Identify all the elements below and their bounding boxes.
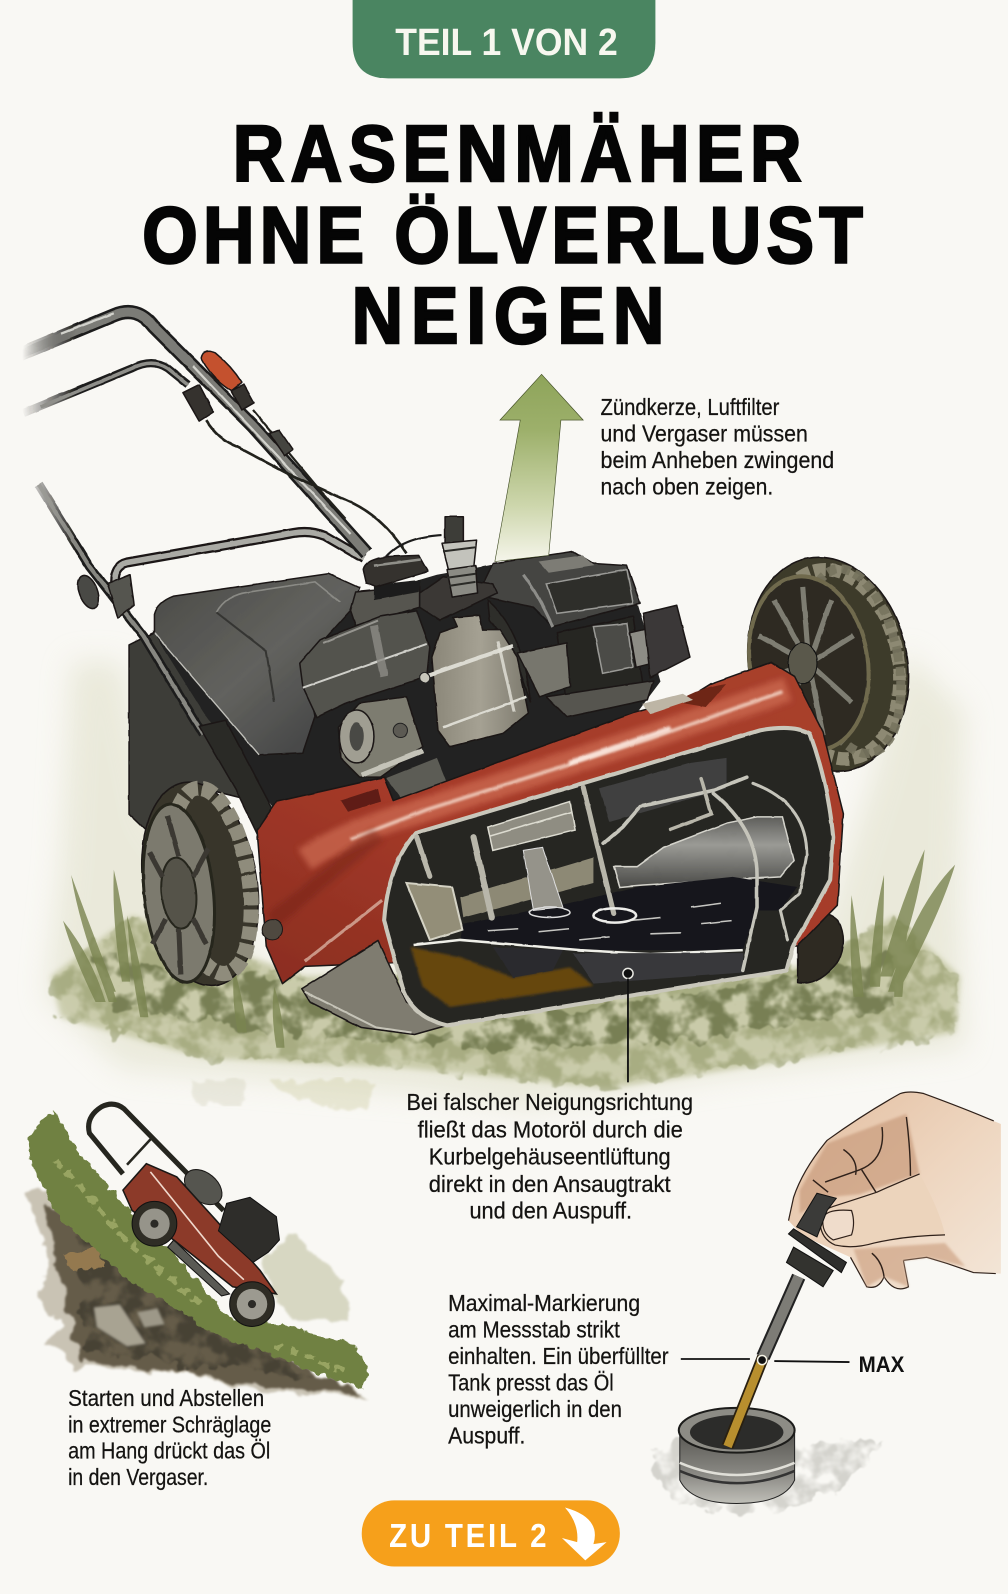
hand silhouette — [789, 1092, 1001, 1289]
green up arrow — [495, 374, 583, 562]
cutaway engine window — [384, 728, 833, 1025]
fuel cap — [351, 555, 428, 626]
piston assembly — [488, 802, 575, 850]
text: dipstick warning: Maximal-Markierung — [448, 1290, 640, 1316]
grass highlight strokes — [56, 1160, 345, 1371]
oil surface line — [414, 940, 743, 954]
hand — [789, 1092, 1001, 1289]
button: next part — [362, 1500, 620, 1567]
slope grass band — [28, 1109, 367, 1390]
header tab: part indicator: TEIL 1 VON 2 — [395, 21, 618, 63]
main handle bars — [20, 312, 442, 559]
title: RASENMÄHER — [233, 110, 802, 198]
oil filler neck — [650, 1408, 884, 1516]
finger tips shading — [854, 1243, 965, 1287]
MAX leader lines and label: MAX — [859, 1352, 904, 1377]
text: dipstick warning: Auspuff. — [448, 1422, 525, 1448]
text: slope warning: am Hang drückt das Öl — [68, 1438, 270, 1464]
text: wrong tilt direction: Kurbelgehäuseentlüftung — [429, 1144, 671, 1170]
main illustration: cutaway lawn mower — [20, 312, 926, 1035]
text: upward components — [601, 394, 834, 499]
text: dipstick warning: Tank presst das Öl — [448, 1370, 614, 1396]
lower frame rail with bracket — [39, 484, 272, 844]
text: slope warning — [68, 1385, 271, 1490]
left wheel — [128, 774, 272, 994]
text: dipstick warning: unweigerlich in den — [448, 1396, 622, 1422]
thumbnail — [823, 1210, 854, 1240]
dark sump — [573, 953, 743, 984]
grass catcher lid — [154, 574, 360, 755]
button: next part: ZU TEIL 2 — [389, 1516, 547, 1555]
crankcase crossbar — [460, 858, 593, 918]
text: dipstick warning: einhalten. Ein überfüllter — [448, 1343, 669, 1369]
text: wrong tilt direction: direkt in den Ansaugtrakt — [429, 1171, 671, 1197]
callout line to crankcase — [623, 968, 633, 1082]
spark plug and boot — [420, 517, 497, 621]
icon: curved down arrow — [562, 1508, 607, 1560]
amber oil — [411, 947, 593, 1007]
red safety lever and clamps — [183, 351, 293, 456]
engine oil pool — [460, 877, 797, 950]
mini mower wheels — [132, 1201, 274, 1326]
text: slope warning: Starten und Abstellen — [68, 1385, 264, 1411]
mini mower handle — [89, 1104, 224, 1211]
upper bail bar — [115, 532, 364, 584]
deck skirt underside — [302, 941, 447, 1035]
amber soil patch — [63, 1247, 106, 1272]
slope illustration — [26, 1104, 370, 1398]
mini mower red body — [123, 1164, 276, 1294]
mini mower catcher — [178, 1162, 229, 1212]
text: slope warning: in den Vergaser. — [68, 1464, 208, 1490]
text: upward components: nach oben zeigen. — [601, 473, 773, 499]
mini mower highlight — [150, 1172, 244, 1280]
slope soil — [46, 1200, 364, 1396]
text: upward components: Zündkerze, Luftfilter — [601, 394, 780, 420]
title: NEIGEN — [352, 271, 664, 360]
dark mass beneath lid and engine — [152, 565, 660, 809]
text: wrong tilt direction: Bei falscher Neigungsrichtung — [406, 1089, 693, 1115]
thumb — [820, 1174, 945, 1247]
title: OHNE ÖLVERLUST — [142, 191, 863, 279]
dark top bar — [600, 758, 727, 822]
grass catcher fabric — [129, 631, 264, 836]
slope wash behind mower — [260, 1234, 350, 1320]
right engine cover — [478, 551, 640, 702]
dipstick — [728, 1193, 846, 1447]
slope stones — [93, 1304, 146, 1347]
watercolor ground wash — [46, 651, 965, 1109]
silver rods and oil passage — [417, 777, 807, 970]
thumb outline — [820, 1174, 945, 1247]
red deck housing — [257, 662, 843, 984]
curled fingers shading — [800, 1114, 920, 1214]
soil fringe wash — [26, 1190, 370, 1398]
header tab: part indicator — [353, 0, 655, 78]
text: slope warning: in extremer Schräglage — [68, 1411, 271, 1437]
hand outline — [789, 1092, 996, 1289]
cone housing — [614, 817, 794, 887]
grass blades — [63, 849, 955, 1048]
small oil block — [406, 883, 462, 940]
text: wrong tilt direction: fließt das Motoröl durch die — [418, 1116, 683, 1142]
mini mower underside — [168, 1240, 230, 1296]
text: dipstick warning: am Messstab strikt — [448, 1317, 620, 1343]
MAX leader lines and label — [681, 1352, 904, 1377]
text: wrong tilt direction — [406, 1089, 693, 1224]
soil dark mottle — [76, 1231, 315, 1378]
creases — [813, 1117, 910, 1277]
text: upward components: und Vergaser müssen — [601, 420, 808, 446]
starter housing and knob — [517, 605, 690, 717]
text: dipstick warning — [448, 1290, 669, 1448]
title — [142, 110, 863, 360]
mini mower crossbar — [127, 1137, 152, 1165]
engine lower block with flywheel — [338, 697, 447, 799]
text: upward components: beim Anheben zwingend — [601, 447, 834, 473]
mini mower engine — [218, 1197, 279, 1262]
right front wheel under deck — [798, 913, 843, 983]
text: wrong tilt direction: und den Auspuff. — [469, 1198, 632, 1224]
carburetor — [420, 615, 528, 747]
air filter cover — [300, 610, 430, 717]
right rear wheel — [730, 543, 926, 785]
